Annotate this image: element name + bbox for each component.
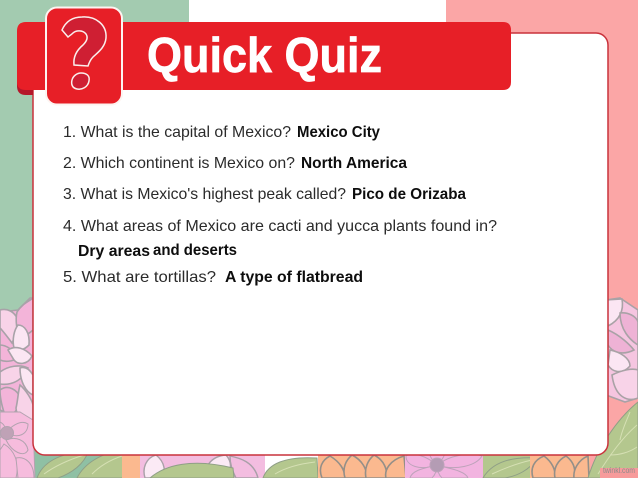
question 4: Dry areas (78, 243, 150, 260)
icon: question mark (62, 17, 106, 89)
title banner (17, 22, 511, 90)
panel: white quiz card (33, 33, 608, 455)
question 1: 1. What is the capital of Mexico? (63, 124, 291, 141)
green leaf, bottom right (588, 402, 638, 478)
question 5: 5. What are tortillas? (63, 269, 216, 286)
question 2: 2. Which continent is Mexico on? (63, 155, 295, 172)
question 5 (63, 269, 363, 286)
question 1: Mexico City (297, 124, 380, 141)
question 2 (63, 155, 407, 172)
green leaves, bottom centre left (150, 458, 318, 478)
question 4 (63, 218, 497, 260)
bottom right pink corner (600, 468, 638, 478)
large pink flower, right (606, 298, 638, 402)
question 4: and deserts (153, 242, 237, 259)
question 4: 4. What areas of Mexico are cacti and yucca plants found in? (63, 218, 497, 235)
question 3: Pico de Orizaba (352, 186, 466, 203)
pink flower, lower left (0, 412, 35, 478)
green leaves, bottom left (33, 450, 127, 478)
question 5: A type of flatbread (225, 269, 363, 286)
orange flower, bottom centre (318, 452, 406, 478)
orange flower, bottom right (530, 452, 590, 478)
orange and pink flower, bottom left of centre (122, 450, 265, 478)
pink flower, bottom centre (405, 452, 483, 478)
green leaf, bottom centre right (483, 452, 537, 478)
banner shadow (17, 40, 33, 95)
question 3: 3. What is Mexico's highest peak called? (63, 186, 346, 203)
large pink flower, left (0, 298, 35, 420)
question 2: North America (301, 155, 407, 172)
icon: question mark tile (46, 8, 122, 104)
heading: Quick Quiz: Quick Quiz (147, 29, 382, 83)
